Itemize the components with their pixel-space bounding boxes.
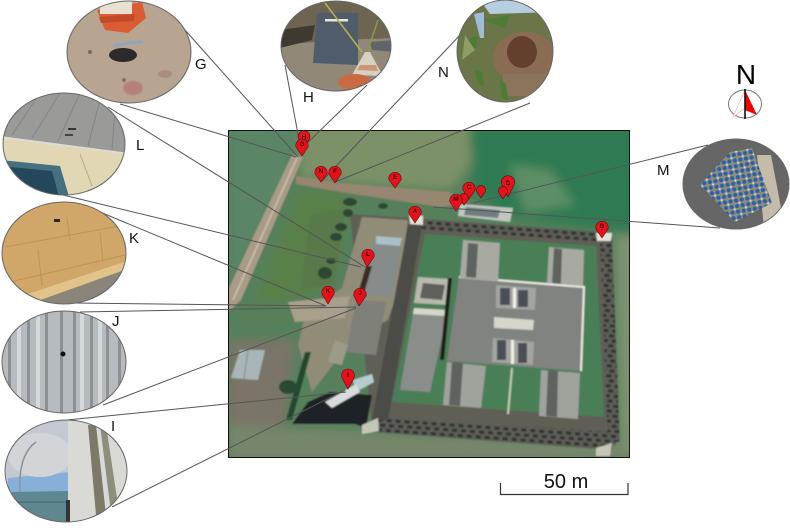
pin letters: L: [366, 251, 370, 258]
pin letters: A: [413, 208, 418, 215]
building at the east end of the path: [458, 204, 513, 222]
trees south-west: [286, 352, 311, 420]
photo L: ceiling and wall with door: [4, 94, 124, 194]
photo G: cone and impact mark: [67, 0, 191, 103]
photo M: blue mesh on asphalt: [684, 140, 788, 228]
photo H: slate and cone: [282, 2, 390, 90]
photo N: marker among plants with caliper: [458, 0, 552, 102]
pin letters: D: [506, 180, 511, 187]
pin letters: F: [333, 168, 337, 175]
pin letters: H: [302, 134, 307, 141]
scale bar: [500, 471, 628, 494]
concrete yard: [298, 217, 408, 392]
pin letters: [299, 134, 605, 379]
scale bar: 50 m: [544, 471, 588, 493]
photo letter labels: M: [657, 162, 670, 179]
satellite map: [228, 125, 640, 460]
photo letter labels: G: [195, 56, 207, 73]
pin letters: J: [358, 290, 362, 297]
leader lines: [63, 30, 720, 507]
photo letter labels: J: [112, 313, 120, 330]
photo K: tan block wall: [2, 202, 126, 304]
photo letter labels: L: [136, 137, 144, 154]
map pins: [296, 131, 608, 389]
photo letter labels: H: [303, 89, 314, 106]
main building: [447, 277, 584, 371]
dirt path: [296, 176, 460, 207]
pin letters: M: [453, 196, 459, 203]
corner towers: [409, 213, 423, 225]
pin letters: G: [299, 141, 305, 148]
water tower and shadow: [292, 392, 372, 428]
grass areas: [228, 125, 640, 460]
photo J: corrugated metal with hole: [0, 310, 130, 415]
photo letter labels: I: [111, 418, 115, 435]
wings: [460, 240, 500, 281]
road: [228, 155, 303, 312]
west buildings: [364, 237, 400, 296]
fence: [421, 221, 597, 242]
photo letter labels: K: [129, 230, 139, 247]
pin letters: C: [467, 184, 472, 191]
greenhouse: [231, 350, 265, 380]
hedge trees: [318, 198, 388, 279]
pin letters: I: [347, 372, 349, 379]
north arrow: N: [736, 59, 756, 90]
pin letters: K: [326, 288, 331, 295]
pin letters: N: [319, 168, 324, 175]
photo letter labels: N: [438, 64, 449, 81]
compound ground: [350, 214, 616, 445]
pin letters: B: [600, 223, 605, 230]
pin letters: E: [393, 174, 398, 181]
north arrow: [728, 59, 762, 119]
central buildings: [414, 277, 450, 305]
tanks near the tower: [353, 374, 374, 392]
photo letter labels: [111, 56, 670, 435]
photo I: water tower and sky: [6, 420, 126, 522]
